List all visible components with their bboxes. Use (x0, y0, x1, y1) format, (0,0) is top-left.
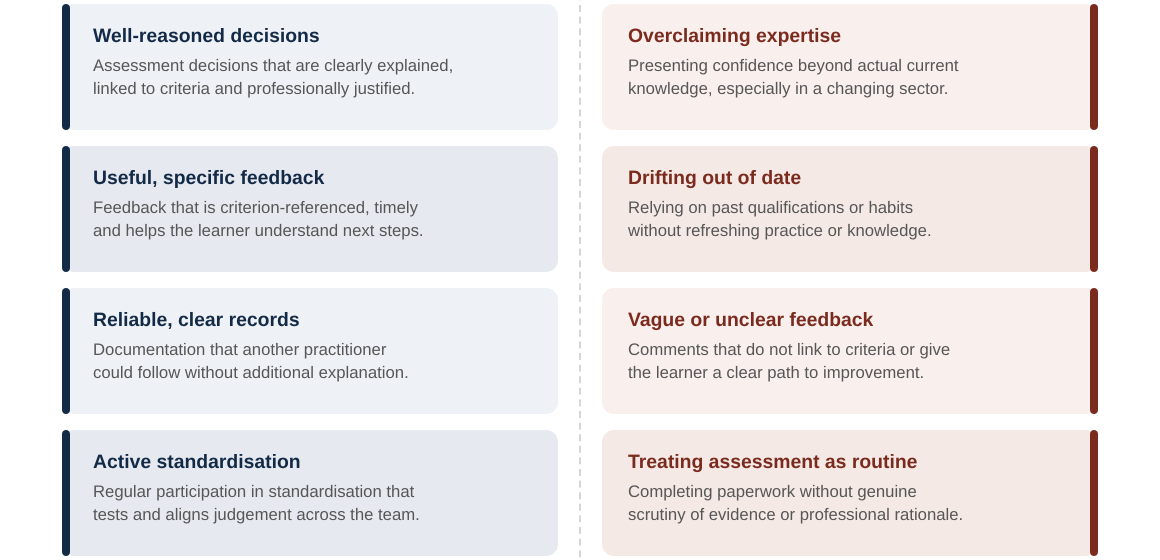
text block (628, 56, 959, 98)
text block: Presenting confidence beyond actual current (628, 56, 959, 75)
heading: Reliable, clear records (93, 309, 300, 331)
text block (628, 340, 950, 382)
accent bar (62, 146, 70, 272)
heading: Active standardisation (93, 451, 301, 473)
heading: Well-reasoned decisions (93, 25, 320, 47)
text block: scrutiny of evidence or professional rationale. (628, 505, 963, 524)
panel: right card vague feedback (602, 288, 1098, 414)
text block: Comments that do not link to criteria or give (628, 340, 950, 359)
text block: Documentation that another practitioner (93, 340, 386, 359)
accent bar (62, 430, 70, 556)
text block (93, 340, 409, 382)
heading: Drifting out of date (628, 167, 801, 189)
text block: and helps the learner understand next steps. (93, 221, 424, 240)
panel: right card drifting out of date (602, 146, 1098, 272)
text block: tests and aligns judgement across the team. (93, 505, 420, 524)
accent bar (1090, 146, 1098, 272)
panel: right card treating assessment as routine (602, 430, 1098, 556)
panel: left card useful feedback (62, 146, 558, 272)
panel: left card active standardisation (62, 430, 558, 556)
accent bar (62, 288, 70, 414)
text block: Feedback that is criterion-referenced, timely (93, 198, 418, 217)
text block: could follow without additional explanation. (93, 363, 409, 382)
accent bar (62, 4, 70, 130)
text block: Assessment decisions that are clearly explained, (93, 56, 453, 75)
accent bar (1090, 288, 1098, 414)
text block (628, 482, 963, 524)
text block: Relying on past qualifications or habits (628, 198, 913, 217)
text block (93, 56, 453, 98)
panel: left card reliable records (62, 288, 558, 414)
heading: Overclaiming expertise (628, 25, 841, 47)
text block (93, 198, 424, 240)
accent bar (1090, 4, 1098, 130)
panel: left card well-reasoned decisions (62, 4, 558, 130)
panel: right card overclaiming expertise (602, 4, 1098, 130)
heading: Useful, specific feedback (93, 167, 324, 189)
heading: Treating assessment as routine (628, 451, 917, 473)
text block: Regular participation in standardisation that (93, 482, 414, 501)
text block (628, 198, 932, 240)
text block: linked to criteria and professionally justified. (93, 79, 415, 98)
text block: without refreshing practice or knowledge. (628, 221, 932, 240)
text block (93, 482, 420, 524)
text block: the learner a clear path to improvement. (628, 363, 924, 382)
heading: Vague or unclear feedback (628, 309, 873, 331)
dashed centre divider (579, 0, 581, 558)
text block: knowledge, especially in a changing sector. (628, 79, 948, 98)
accent bar (1090, 430, 1098, 556)
text block: Completing paperwork without genuine (628, 482, 917, 501)
